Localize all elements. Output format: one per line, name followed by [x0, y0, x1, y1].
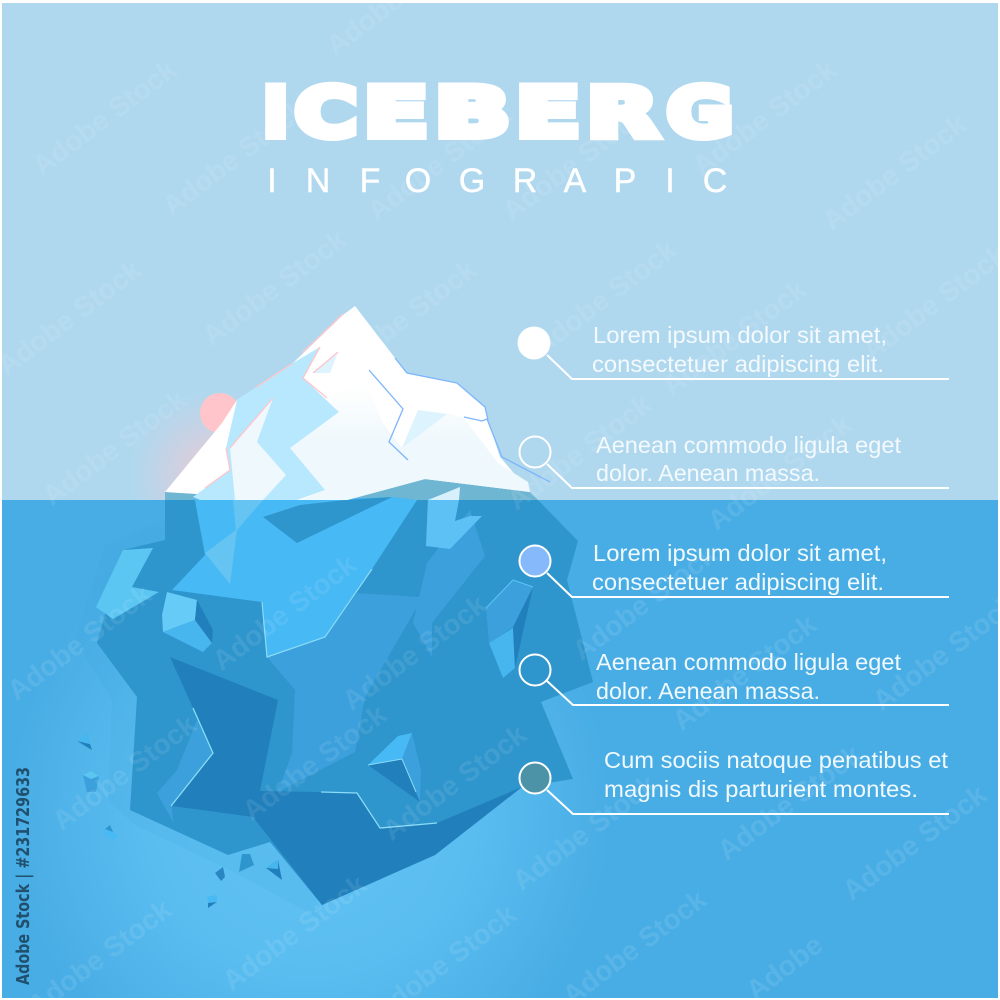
watermarks: Adobe Stock: [2, 578, 157, 706]
bright underwater facet: [172, 495, 417, 657]
watermarks: Adobe Stock: [837, 778, 992, 906]
white iceberg tip: [165, 306, 530, 500]
subtitle: R: [513, 162, 537, 200]
leader 4: [547, 681, 949, 705]
watermarks: Adobe Stock: [507, 768, 662, 896]
title: C: [295, 74, 357, 153]
facet outline on bright area: [262, 569, 372, 657]
watermarks: Adobe Stock: [207, 548, 362, 676]
leader 2: [547, 464, 949, 488]
iceberg: [75, 306, 593, 920]
sky background: [2, 3, 998, 500]
deep dark facet: [170, 657, 522, 905]
middle facet: [267, 593, 420, 792]
watermarks: Adobe Stock: [687, 53, 842, 181]
text 2: dolor. Aenean massa.: [596, 460, 820, 486]
dark facet under waterline: [263, 497, 392, 543]
text 1: consectetuer adipiscing elit.: [592, 351, 884, 377]
debris: [77, 732, 282, 908]
subtitle: G: [459, 162, 485, 200]
title: E: [516, 74, 580, 153]
pink edge lines: [205, 314, 343, 488]
sun: [200, 393, 240, 433]
text 4: Aenean commodo ligula eget: [596, 649, 902, 675]
watermarks: Adobe Stock: [817, 108, 972, 236]
debris piece 7: [207, 895, 217, 908]
callout 2: [520, 432, 949, 488]
subtitle: I: [267, 162, 277, 200]
subtitle: [267, 162, 727, 200]
watermarks: Adobe Stock: [702, 408, 857, 536]
faint shadow around submerged hull: [75, 520, 322, 920]
marker 2: [520, 436, 550, 468]
watermarks: Adobe Stock: [657, 273, 812, 401]
marker 1: [518, 326, 550, 360]
watermarks: Adobe Stock: [217, 868, 372, 996]
leader 1: [547, 355, 949, 379]
watermarks: Adobe Stock: [502, 388, 657, 516]
title: B: [435, 74, 510, 153]
title: I: [263, 74, 288, 153]
title: [263, 74, 733, 153]
watermarks: Adobe Stock: [157, 93, 312, 221]
small pale facets: [313, 352, 447, 448]
text 2: Aenean commodo ligula eget: [596, 432, 902, 458]
submerged hull: [97, 500, 593, 905]
crack highlight lines: [171, 708, 437, 828]
marker 3: [520, 546, 550, 576]
text 5: Cum sociis natoque penatibus et: [604, 747, 949, 773]
leader 3: [547, 573, 949, 597]
subtitle: C: [703, 162, 727, 200]
subtitle: A: [564, 162, 587, 200]
debris piece 1: [77, 732, 92, 750]
callout 4: [520, 649, 949, 705]
text 1: Lorem ipsum dolor sit amet,: [593, 322, 887, 348]
pink glow behind iceberg: [125, 385, 305, 500]
callout 3: [520, 540, 949, 597]
lower left facet: [157, 720, 213, 822]
watermarks: Adobe Stock: [27, 53, 182, 181]
stock id: Adobe Stock | #231729633: [14, 767, 34, 985]
watermarks: Adobe Stock: [527, 233, 682, 361]
shaded pale face: [290, 383, 530, 500]
leader 5: [547, 790, 949, 814]
pale submerged shard: [205, 500, 263, 584]
left light facet: [96, 548, 159, 619]
debris piece 3: [104, 825, 118, 840]
crystal center: [368, 733, 421, 802]
debris piece 4: [239, 854, 254, 872]
subtitle: N: [306, 162, 330, 200]
crystal right: [486, 580, 533, 678]
watermarks: Adobe Stock: [47, 708, 202, 836]
subtitle: I: [665, 162, 675, 200]
light blue face: [193, 347, 339, 500]
pale inner shard: [230, 398, 286, 500]
watermarks: Adobe Stock: [377, 718, 532, 846]
watermarks: Adobe Stock: [197, 223, 352, 351]
hull above waterline: [165, 479, 538, 500]
debris piece 5: [266, 860, 282, 880]
subtitle: O: [405, 162, 431, 200]
watermarks: Adobe Stock: [237, 698, 392, 826]
title: G: [667, 74, 733, 153]
upper right facet: [413, 510, 485, 657]
watermarks: Adobe Stock: [327, 253, 482, 381]
title: R: [587, 74, 658, 153]
blue crack lines: [369, 358, 550, 482]
watermarks: Adobe Stock: [362, 98, 517, 226]
ice facet above waterline: [428, 487, 460, 500]
crystal left: [162, 592, 213, 652]
subtitle: P: [614, 162, 636, 200]
watermarks: Adobe Stock: [337, 588, 492, 716]
text 3: Lorem ipsum dolor sit amet,: [593, 540, 887, 566]
callout 1: [518, 322, 949, 379]
watermarks: Adobe Stock: [37, 383, 192, 511]
watermarks: Adobe Stock: [667, 608, 822, 736]
square ice facet at waterline: [426, 498, 482, 549]
watermarks: Adobe Stock: [497, 98, 652, 226]
watermarks: Adobe Stock: [712, 738, 867, 866]
watermarks: Adobe Stock: [567, 538, 722, 666]
subtitle: F: [360, 162, 380, 200]
text 4: dolor. Aenean massa.: [596, 678, 820, 704]
marker 5: [520, 762, 550, 794]
text 3: consectetuer adipiscing elit.: [592, 569, 884, 595]
callout 5: [520, 747, 949, 814]
title: E: [364, 74, 428, 153]
text 5: magnis dis parturient montes.: [604, 776, 918, 802]
water background: [2, 500, 998, 998]
debris piece 6: [215, 867, 225, 881]
marker 4: [520, 654, 550, 686]
debris piece 2: [83, 771, 99, 792]
